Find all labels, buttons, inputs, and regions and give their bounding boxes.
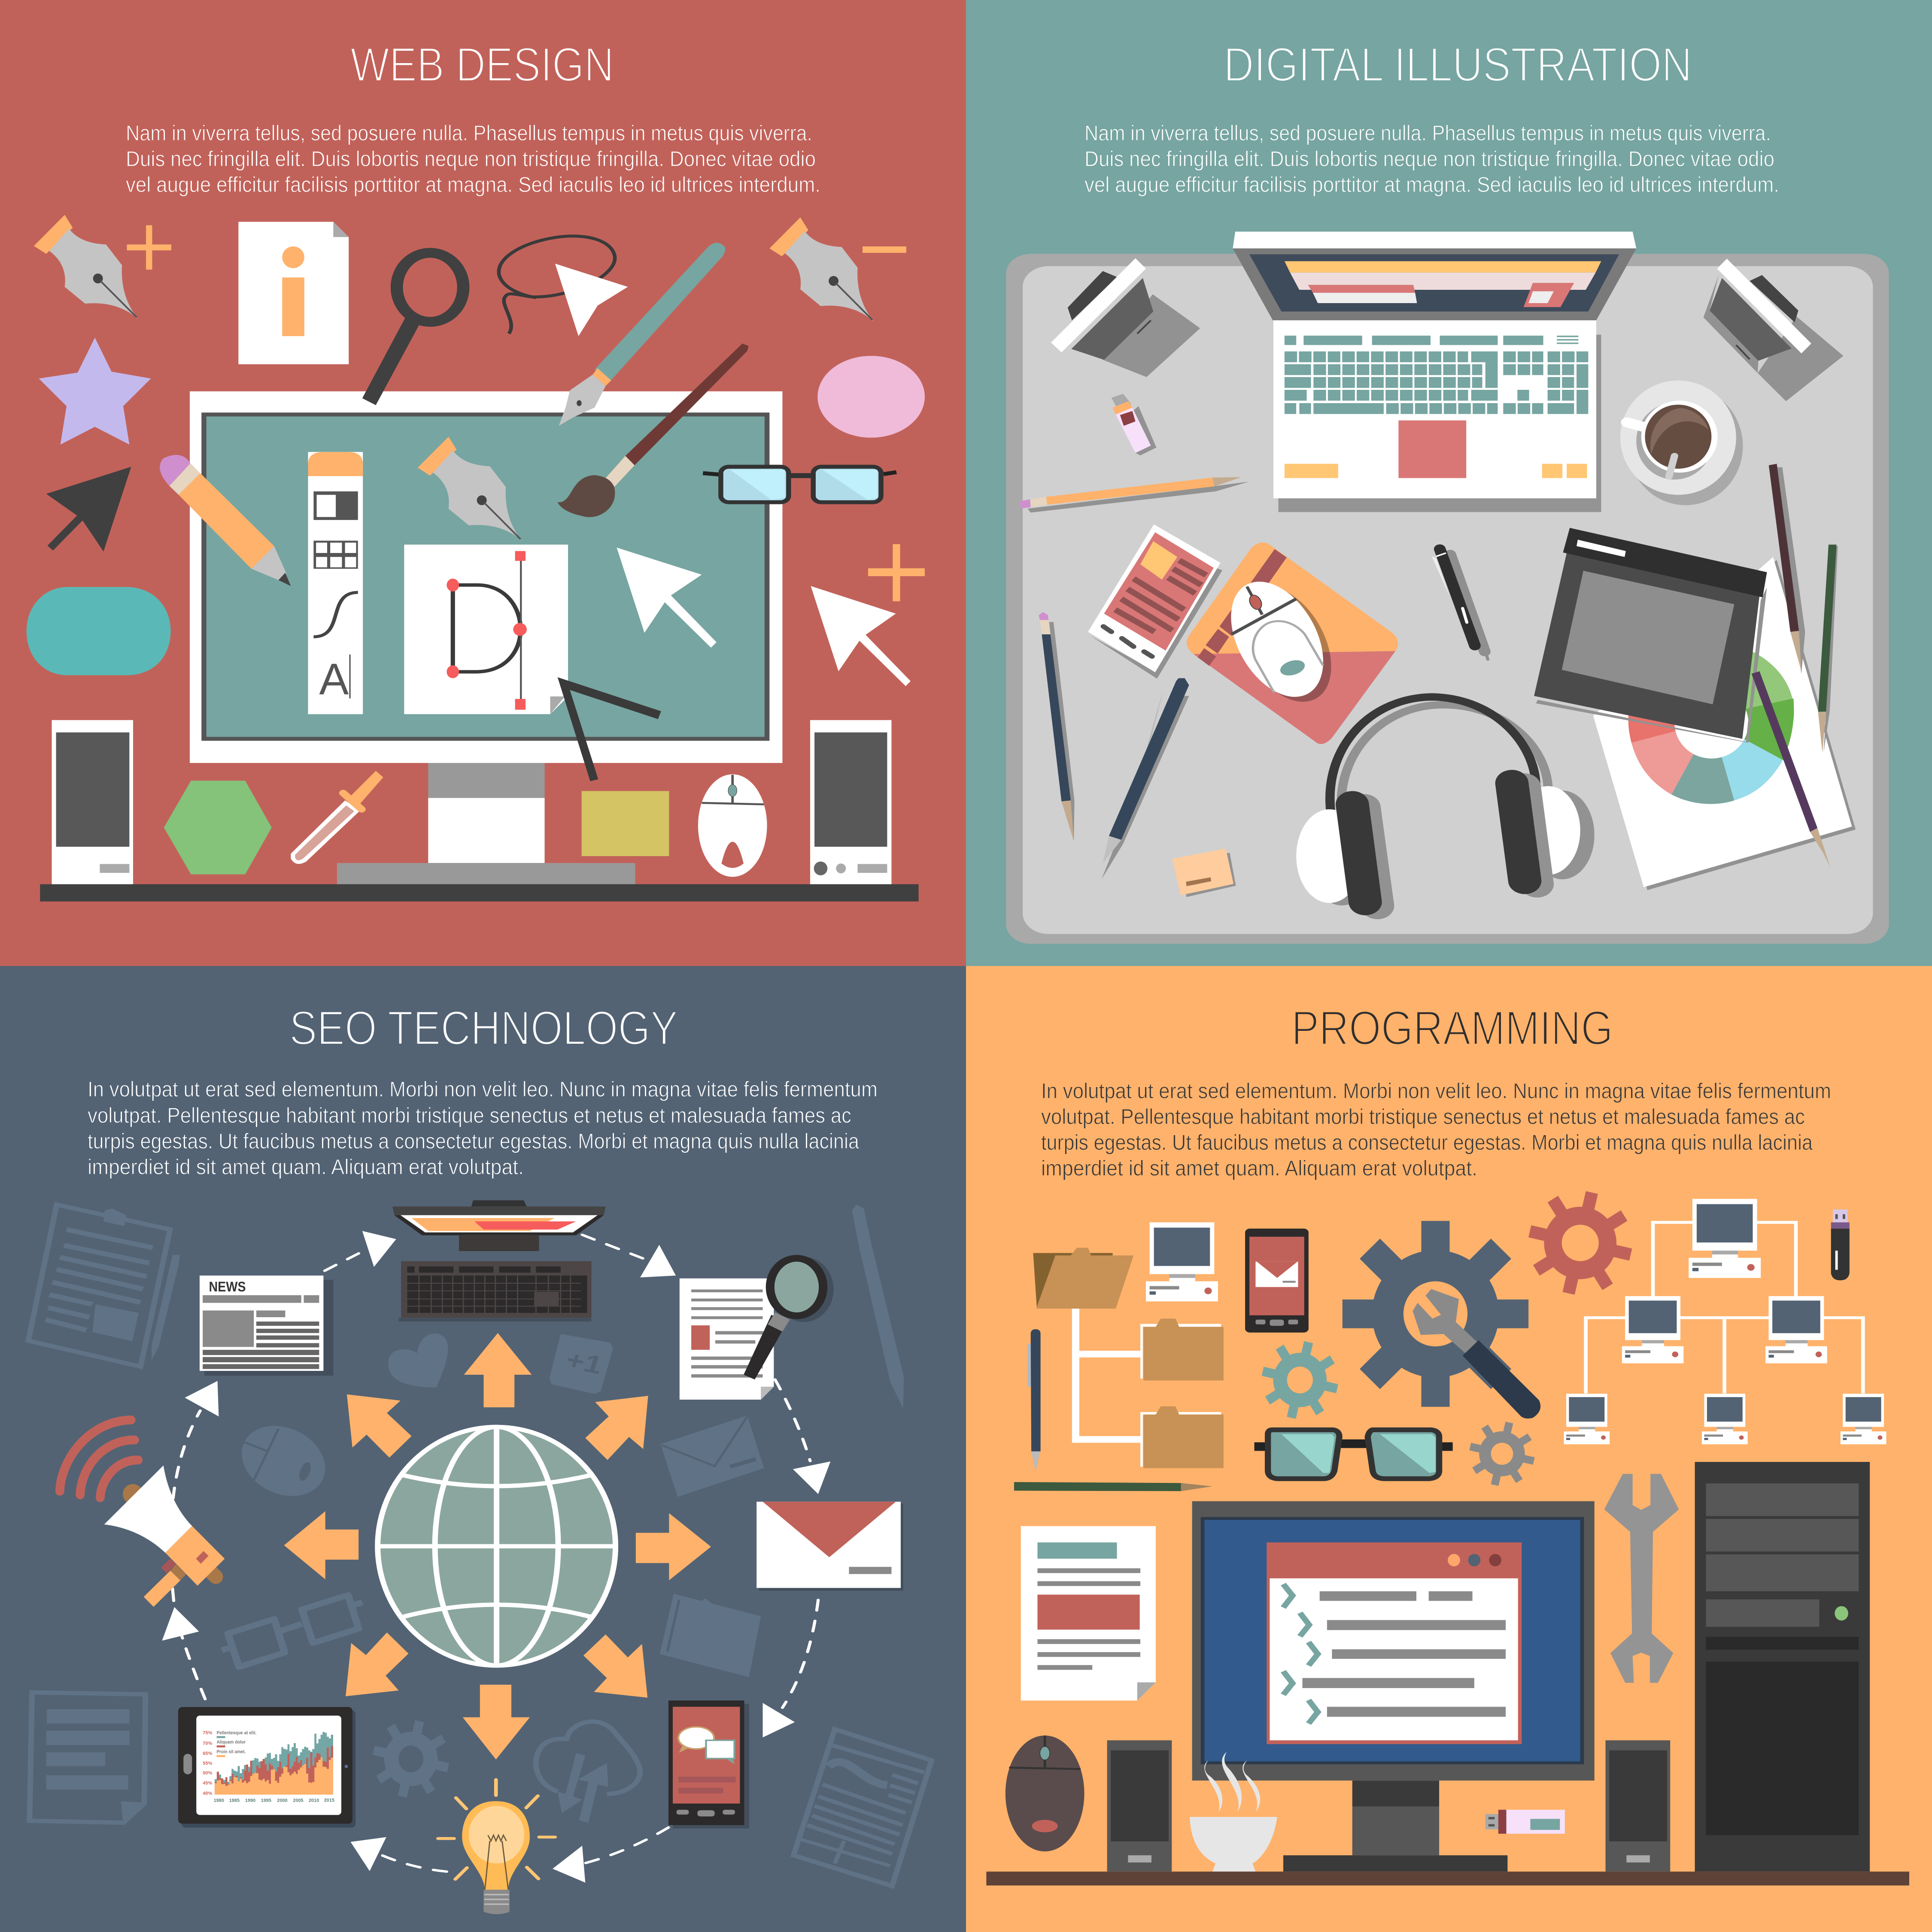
heading: digital illustration: DIGITAL ILLUSTRATION — [1224, 38, 1692, 91]
icon: green pencil — [1014, 1482, 1212, 1491]
icon: usb stick — [1112, 394, 1156, 456]
icon: tablet with chart: 1995 — [261, 1798, 271, 1803]
icon: tablet with chart: 1980 — [214, 1798, 224, 1803]
icon: yellow square — [582, 791, 669, 856]
icon: black stylus — [1432, 549, 1488, 659]
icon: wrench — [1604, 1474, 1679, 1683]
document with bezier letter D — [404, 545, 568, 714]
icon: magnifier — [362, 253, 463, 405]
text block: digital illustration intro — [1084, 121, 1779, 197]
icon: large gear with wrench — [1343, 1221, 1540, 1419]
icon: red gear — [1518, 1181, 1642, 1305]
icon: newspaper — [200, 1276, 333, 1376]
icon: eraser — [1174, 850, 1236, 897]
icon: light bulb — [438, 1780, 555, 1914]
icon: blue pen — [1102, 678, 1189, 879]
icon: orange pencil — [1020, 477, 1249, 513]
icon: right speaker — [1606, 1740, 1670, 1871]
icon: mouse — [698, 774, 767, 877]
text block: seo technology intro: volutpat. Pellentesque habitant morbi tristique senectus et netus et malesuada fames ac — [88, 1103, 851, 1127]
icon: megaphone with signal — [60, 1420, 225, 1607]
icon: usb drive — [1485, 1810, 1565, 1834]
icon: smartphone with chat — [668, 1701, 749, 1829]
icon: tablet with chart: 2010 — [309, 1798, 319, 1803]
icon: pen nib on screen — [418, 437, 522, 541]
icon: computer network — [1564, 1199, 1886, 1444]
icon: steaming cup — [1190, 1752, 1277, 1871]
text block: seo technology intro: turpis egestas. Ut faucibus metus a consectetur egestas. Morbi et magna quis nulla lacinia — [88, 1129, 859, 1153]
text block: programming intro: volutpat. Pellentesque habitant morbi tristique senectus et netus et malesuada fames ac — [1041, 1105, 1805, 1129]
heading: seo technology: SEO TECHNOLOGY — [289, 1001, 678, 1055]
icon: tablet with chart: 1990 — [245, 1798, 255, 1803]
icon: right speaker top view — [1704, 259, 1843, 401]
icon: paper with color wheel — [1593, 557, 1856, 890]
icon: usb stick — [1831, 1209, 1850, 1280]
text block: programming intro: In volutpat ut erat sed elementum. Morbi non velit leo. Nunc in magna vitae felis fermentum — [1041, 1079, 1831, 1103]
icon: pink ellipse — [817, 356, 925, 437]
faded icon: envelope — [660, 1416, 764, 1497]
icon: pen nib minus — [769, 217, 906, 321]
faded icon: cloud — [536, 1722, 640, 1823]
icon: laptop — [1233, 232, 1636, 512]
icon: tablet with chart: Aliquam dolor — [217, 1740, 246, 1745]
icon: graphics tablet — [1534, 528, 1767, 743]
icon: purple pencil — [1752, 671, 1830, 867]
faded icon: heart — [388, 1334, 448, 1388]
icon: tablet with chart: Pellentesque at elit. — [217, 1730, 256, 1735]
panel: programming — [966, 966, 1932, 1932]
icon: teal pen — [559, 243, 725, 426]
dashed cycle arrows — [162, 1231, 830, 1883]
icon: tablet with chart — [178, 1707, 355, 1828]
text block: web design intro: Duis nec fringilla elit. Duis lobortis neque non tristique fringilla. Donec vitae odio — [126, 147, 816, 171]
text block: digital illustration intro: Duis nec fringilla elit. Duis lobortis neque non tristique fringilla. Donec vitae odio — [1084, 147, 1774, 171]
icon: info document — [238, 222, 349, 364]
icon: tablet with chart: 1985 — [229, 1798, 240, 1803]
icon: pencil — [160, 455, 291, 586]
programming illustration — [986, 1181, 1909, 1886]
panel: seo technology — [0, 966, 966, 1932]
icon: hexagon — [164, 781, 272, 875]
icon: pen nib plus — [34, 215, 171, 319]
icon: dark cursor outline — [558, 677, 661, 781]
icon: desktop monitor and keyboard — [392, 1200, 606, 1321]
icon: tablet with chart: 55% — [203, 1761, 213, 1766]
heading: web design: WEB DESIGN — [350, 38, 614, 91]
faded icon: mouse — [225, 1413, 342, 1509]
icon: left speaker — [1107, 1740, 1172, 1871]
folder tree — [1033, 1248, 1224, 1468]
icon: envelope — [756, 1502, 903, 1591]
icon: tablet with chart: 65% — [203, 1751, 213, 1756]
shelf — [986, 1871, 1909, 1886]
text block: programming intro: imperdiet id sit amet quam. Aliquam erat volutpat. — [1041, 1156, 1477, 1180]
faded icon: clipboard — [28, 1205, 180, 1367]
icon: tablet with chart: 75% — [203, 1730, 213, 1735]
text block: web design intro — [126, 121, 820, 197]
icon: left speaker — [52, 720, 133, 884]
faded icon: plus one badge: +1 — [562, 1346, 606, 1379]
web design illustration — [27, 215, 925, 902]
icon: newspaper: NEWS — [209, 1279, 246, 1294]
icon: teal gear — [1254, 1334, 1346, 1427]
icon: headphones — [1296, 697, 1595, 906]
icon: eyedropper — [291, 771, 383, 864]
text block: digital illustration intro: vel augue efficitur facilisis porttitor at magna. Sed iaculis leo id ultrices interdum. — [1084, 173, 1779, 197]
desk illustration — [1006, 232, 1889, 944]
text block: digital illustration intro: Nam in viverra tellus, sed posuere nulla. Phasellus tempus in metus quis viverra. — [1084, 121, 1771, 145]
heading: programming: PROGRAMMING — [1291, 1001, 1613, 1055]
icon: right speaker — [810, 720, 891, 884]
faded icon: gear — [365, 1713, 457, 1805]
text block: seo technology intro: In volutpat ut erat sed elementum. Morbi non velit leo. Nunc in magna vitae felis fermentum — [88, 1077, 878, 1101]
arrows: radial orange arrows — [284, 1333, 711, 1759]
icon: glasses — [703, 467, 896, 502]
icon: tablet with chart: 2005 — [293, 1798, 304, 1803]
panel: digital illustration — [966, 0, 1932, 966]
icon: brochure — [1088, 524, 1222, 679]
desk surface — [1006, 254, 1889, 944]
icon: computer — [1146, 1222, 1218, 1301]
icon: tablet with chart: 40% — [203, 1791, 213, 1796]
icon: paint brush — [558, 343, 749, 517]
icon: globe — [378, 1427, 616, 1665]
text block: web design intro: vel augue efficitur facilisis porttitor at magna. Sed iaculis leo id ultrices interdum. — [126, 173, 820, 197]
faded icon: glasses — [222, 1595, 362, 1667]
icon: phone with mail — [1245, 1229, 1309, 1333]
icon: white cursor right — [811, 586, 911, 686]
text block: programming intro: turpis egestas. Ut faucibus metus a consectetur egestas. Morbi et magna quis nulla lacinia — [1041, 1130, 1813, 1154]
shelf — [40, 884, 919, 902]
icon: gray gear — [1463, 1415, 1541, 1492]
faded icon: pen — [852, 1205, 904, 1409]
icon: monitor — [190, 391, 782, 884]
icon: dark mouse — [1005, 1735, 1084, 1851]
faded icon: folder — [663, 1597, 759, 1674]
icon: white cursor on screen — [617, 547, 717, 647]
icon: teal rounded shape — [27, 587, 170, 675]
icon: mouse pad with mouse — [1187, 542, 1398, 744]
text block: web design intro: Nam in viverra tellus, sed posuere nulla. Phasellus tempus in metus quis viverra. — [126, 121, 812, 145]
icon: pen — [1028, 1329, 1041, 1472]
icon: tablet with chart: 70% — [203, 1741, 213, 1746]
icon: blue pencil — [1039, 612, 1075, 841]
icon: green pencil — [1818, 545, 1838, 753]
faded icon: document — [30, 1692, 146, 1823]
faded icon: plus one badge — [550, 1334, 613, 1394]
toolbar — [308, 452, 363, 714]
icon: lasso cursor — [499, 236, 628, 336]
icon: dark arrow — [46, 467, 131, 552]
icon: tablet with chart: 50% — [203, 1771, 213, 1776]
seo illustration — [28, 1200, 932, 1914]
text block: programming intro — [1041, 1079, 1831, 1180]
icon: tablet with chart: Proin sit amet. — [217, 1750, 246, 1755]
icon: orange plus — [868, 544, 925, 601]
icon: document — [1021, 1526, 1156, 1701]
text block: seo technology intro: imperdiet id sit amet quam. Aliquam erat volutpat. — [88, 1155, 524, 1179]
icon: left speaker top view — [1051, 258, 1200, 377]
text block: seo technology intro — [88, 1077, 878, 1179]
icon: tower computer — [1695, 1462, 1870, 1871]
icon: document with magnifier — [680, 1257, 834, 1400]
icon: tablet with chart: 2015 — [324, 1798, 334, 1803]
faded icon: article — [793, 1729, 932, 1886]
icon: coffee cup — [1620, 380, 1743, 505]
icon: tablet with chart: 2000 — [277, 1798, 288, 1803]
icon: brown pencil — [1769, 464, 1805, 674]
panel: web design — [0, 0, 966, 966]
icon: glasses — [1255, 1430, 1453, 1479]
icon: code monitor — [1192, 1501, 1595, 1871]
icon: star — [39, 337, 151, 444]
toolbar: A — [319, 654, 349, 704]
icon: tablet with chart: 45% — [203, 1780, 213, 1786]
